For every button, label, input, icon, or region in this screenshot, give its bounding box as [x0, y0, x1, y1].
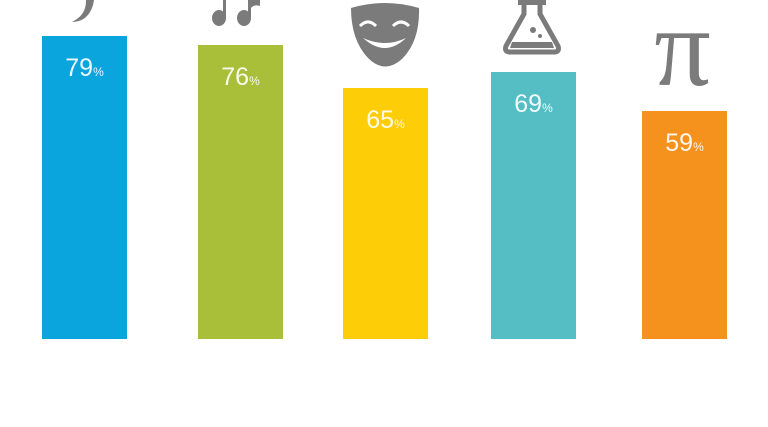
- bar: 65%: 65%: [366, 106, 405, 134]
- bar: 76%: [198, 45, 283, 339]
- icon: theatre mask: [351, 3, 420, 66]
- icon: music notes: [212, 0, 260, 26]
- icon: partial shape top-left: [72, 0, 94, 22]
- bar: 79%: 79%: [65, 54, 104, 82]
- bar: 76%: 76%: [221, 63, 260, 91]
- icon: flask: [503, 0, 561, 54]
- bar: 79%: [42, 36, 127, 339]
- bar: 59%: 59%: [665, 129, 704, 157]
- bar: 69%: [491, 72, 576, 339]
- bar: 59%: [642, 111, 727, 339]
- bar: 69%: 69%: [514, 90, 553, 118]
- bar: 65%: [343, 88, 428, 339]
